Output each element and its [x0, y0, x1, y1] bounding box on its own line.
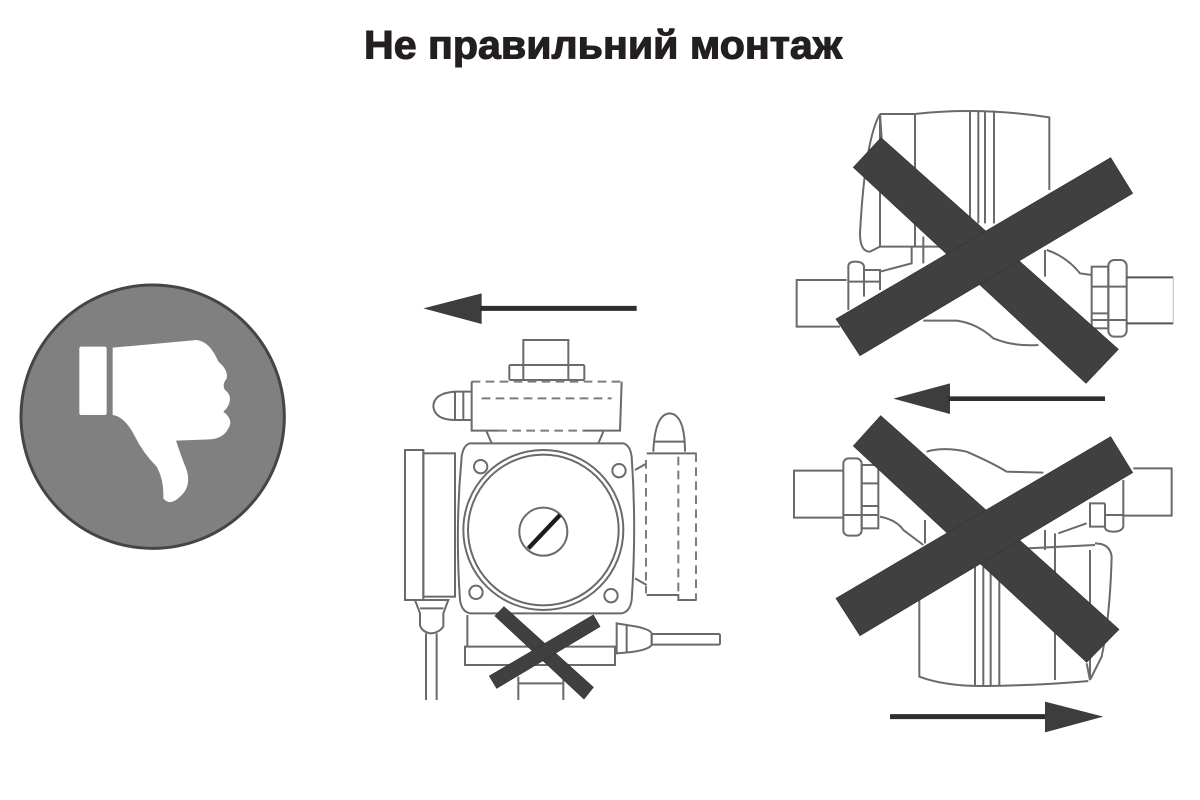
left box and cable	[405, 450, 455, 700]
pump diagram: front view	[405, 293, 720, 700]
title: Не правильний монтаж	[364, 24, 843, 68]
pump housing	[880, 449, 1112, 686]
lower section and right cable	[465, 615, 720, 700]
large cross mark	[836, 138, 1133, 383]
arrow: flow right	[890, 702, 1103, 732]
left pipe and nut	[794, 458, 878, 536]
pump housing	[860, 111, 1092, 345]
icon: thumbs down	[21, 285, 284, 548]
rotor screw	[519, 508, 567, 556]
pump diagram: head up, crossed out	[797, 111, 1173, 383]
right dashed box	[635, 413, 697, 600]
small cross mark	[489, 607, 600, 699]
pump diagram: head down, crossed out	[794, 416, 1172, 732]
left pipe and nut	[797, 262, 880, 327]
right pipe and nut	[1092, 260, 1173, 337]
arrow: middle flow left	[893, 383, 1105, 414]
pump top cap	[509, 340, 584, 380]
large cross mark	[836, 416, 1133, 662]
arrow: flow to the left	[423, 293, 637, 324]
dashed terminal box	[433, 382, 622, 443]
pump body	[458, 443, 634, 613]
right pipe and nut	[1090, 468, 1172, 532]
